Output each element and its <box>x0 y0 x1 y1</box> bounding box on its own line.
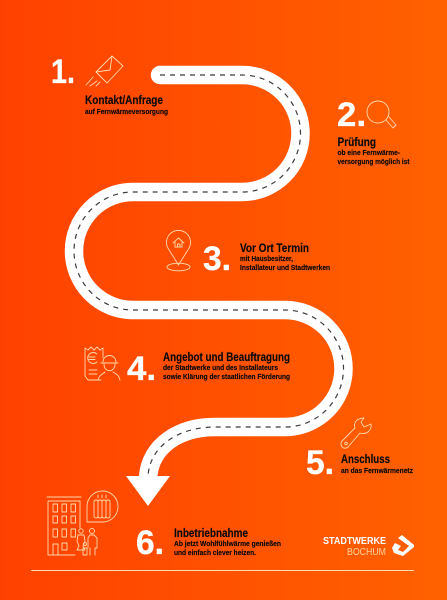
number 3: 3. <box>203 240 231 278</box>
heading: Vor Ort Termin: Vor Ort Termin <box>240 243 309 255</box>
icon: wrench <box>341 418 371 448</box>
text: subline 1: auf Fernwärmeversorgung <box>85 109 168 116</box>
heading: Inbetriebnahme: Inbetriebnahme <box>174 528 248 540</box>
heading: Kontakt/Anfrage: Kontakt/Anfrage <box>85 95 163 107</box>
step 3 <box>166 230 330 278</box>
text: subline 3: Installateur und Stadtwerken <box>240 265 330 272</box>
winding road <box>74 75 344 506</box>
icon: flying envelope <box>86 56 123 86</box>
icon: location pin with house <box>166 230 190 271</box>
number 6: 6. <box>136 524 164 562</box>
text: subline 2: ob eine Fernwärme- <box>338 150 401 157</box>
step 6 <box>47 491 281 562</box>
step 1 <box>51 53 168 116</box>
text: subline 6: und einfach clever heizen. <box>174 550 256 557</box>
text: subline 3: mit Hausbesitzer, <box>240 256 293 263</box>
text: subline 2: versorgung möglich ist <box>338 159 410 166</box>
icon: magnifier <box>367 101 396 128</box>
number 4: 4. <box>127 350 156 388</box>
heading: Anschluss: Anschluss <box>341 454 390 466</box>
text: subline 6: Ab jetzt Wohlfühlwärme genießen <box>174 541 281 548</box>
logo mark <box>392 535 414 556</box>
arrowhead <box>126 476 170 506</box>
step 2 <box>337 96 410 166</box>
number 2: 2. <box>337 96 366 134</box>
logo: Stadtwerke Bochum <box>323 535 414 558</box>
footer line <box>31 570 414 571</box>
step 4 <box>85 347 290 388</box>
icon: receipt and worker <box>85 347 120 380</box>
number 1: 1. <box>51 53 75 91</box>
step 5 <box>306 418 413 482</box>
text: subline 5: an das Fernwärmenetz <box>341 468 413 475</box>
heading: Prüfung: Prüfung <box>338 137 376 149</box>
logo subline: BOCHUM <box>347 547 386 558</box>
number 5: 5. <box>306 444 334 482</box>
text: subline 4: sowie Klärung der staatlichen Förderung <box>163 374 290 381</box>
logo wordmark: STADTWERKE <box>323 536 386 547</box>
heading: Angebot und Beauftragung: Angebot und Beauftragung <box>163 352 290 364</box>
text: subline 4: der Stadtwerke und des Installateurs <box>163 365 278 372</box>
icon: building, radiator and family <box>47 491 118 555</box>
